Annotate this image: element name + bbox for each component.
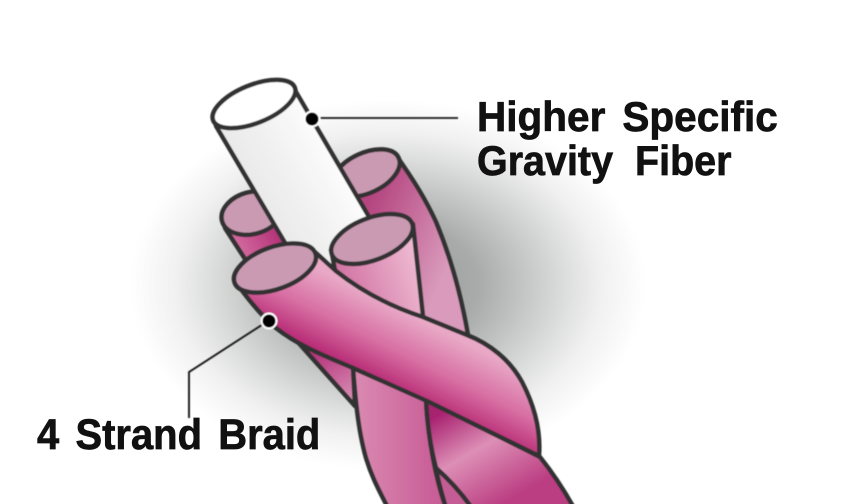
lower right strand xyxy=(426,400,574,504)
grey background glow xyxy=(130,100,646,470)
leader line: 4 strand braid xyxy=(189,312,278,418)
lower left triangle strand xyxy=(296,340,355,406)
label: higher specific gravity fiber xyxy=(477,93,778,184)
strand: back right xyxy=(325,140,468,335)
label: higher specific gravity fiber: Gravity Fiber xyxy=(477,137,732,184)
strand: white higher specific gravity fiber xyxy=(206,70,372,278)
strand: back left xyxy=(217,185,295,262)
braid artwork xyxy=(189,70,574,504)
strand: middle front xyxy=(324,204,424,325)
label: higher specific gravity fiber: Higher Specific xyxy=(477,93,778,140)
strand: main front crossing xyxy=(227,234,539,456)
leader line: higher specific gravity fiber xyxy=(304,110,458,128)
lower centre strand xyxy=(353,367,446,504)
lower small dark strand xyxy=(436,468,472,504)
label: 4 strand braid: 4 Strand Braid xyxy=(37,411,320,458)
